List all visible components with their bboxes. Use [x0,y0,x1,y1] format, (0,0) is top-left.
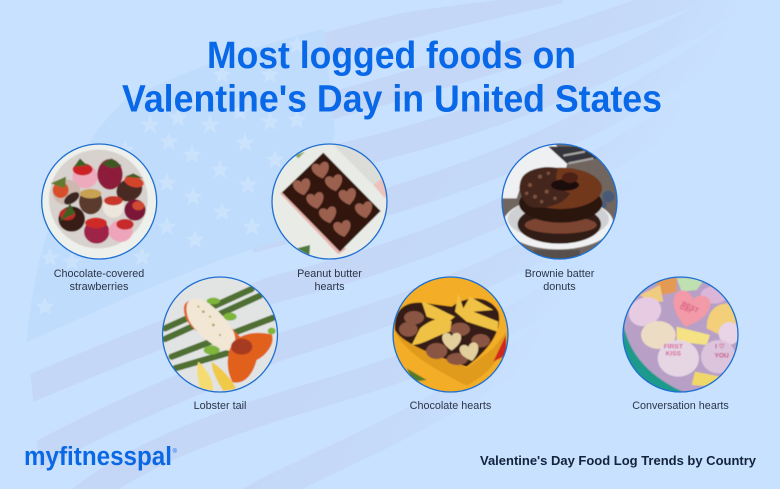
caption: Chocolate hearts [410,400,492,412]
photo: box of heart chocolates [270,142,390,262]
food item: chocolate hearts [390,275,510,412]
photo: lobster tail with asparagus [160,275,280,395]
caption: Peanut butter [297,268,362,280]
caption: Lobster tail [194,400,246,412]
footer title: Valentine's Day Food Log Trends by Country [480,453,757,468]
photo: bowl of candy hearts [620,275,740,395]
logo: myfitnesspal: myfitnesspal [24,443,172,471]
photo: bowl of candy hearts: BEST [680,301,699,315]
title: Valentine's Day in United States [122,78,662,120]
caption: Brownie batter [525,268,595,280]
caption: strawberries [70,281,129,293]
photo: bowl of candy hearts: FIRST [664,343,683,350]
title: Most logged foods on [207,35,576,77]
caption: Chocolate-covered [54,268,144,280]
food item: peanut butter hearts [270,142,390,293]
caption: hearts [314,281,345,293]
logo: myfitnesspal: ® [172,448,178,455]
photo: bowl of candy hearts: I ♡ [715,342,725,350]
photo: heart-shaped chocolate box [390,275,510,395]
food item: chocolate-covered strawberries [40,142,160,293]
background: faded American flag [30,0,652,489]
title [122,35,662,120]
photo: bowl of candy hearts: KISS [666,351,682,358]
caption: Conversation hearts [632,400,729,412]
food item: lobster tail [160,275,280,412]
photo: strawberries on plate [40,142,160,262]
caption: donuts [543,281,576,293]
photo: bowl of candy hearts: YOU [714,353,729,360]
photo: stacked chocolate donuts [500,142,620,262]
food item: conversation hearts [620,275,740,412]
food item: brownie batter donuts [500,142,620,293]
photo: bowl of candy hearts: DAY [679,305,692,315]
